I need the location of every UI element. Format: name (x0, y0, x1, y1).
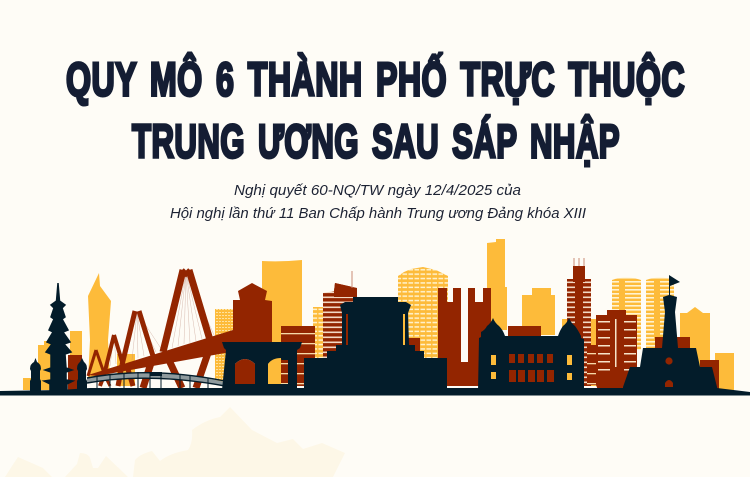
pagoda (44, 283, 73, 391)
red buildings (68, 266, 719, 391)
bridge deck (88, 330, 233, 376)
lower bridge railing (87, 372, 225, 388)
mausoleum column gaps (346, 314, 405, 345)
palace windows (491, 354, 673, 387)
subtitle: Hội nghị lần thứ 11 Ban Chấp hành Trung ương Đảng khóa XIII (170, 206, 586, 222)
city skyline (0, 239, 750, 396)
small tower left (30, 358, 41, 391)
bridge cables (105, 272, 214, 368)
small tower right (77, 358, 87, 391)
subtitle: Nghị quyết 60-NQ/TW ngày 12/4/2025 của (234, 183, 521, 199)
gate arch fill (235, 358, 288, 384)
palace (478, 318, 584, 391)
spikes on red tower (352, 258, 584, 288)
yellow background buildings (23, 239, 734, 391)
white windows on red block (598, 319, 636, 370)
striped residential towers (313, 267, 674, 360)
mausoleum (304, 297, 447, 391)
dark landmarks (30, 275, 718, 391)
title (66, 52, 685, 168)
subtitle (170, 183, 586, 222)
fortress flag tower (623, 275, 718, 391)
faint mountain map decoration (5, 407, 345, 477)
gate arches (222, 342, 302, 390)
bridge pylons (88, 270, 213, 388)
ground (0, 388, 750, 396)
